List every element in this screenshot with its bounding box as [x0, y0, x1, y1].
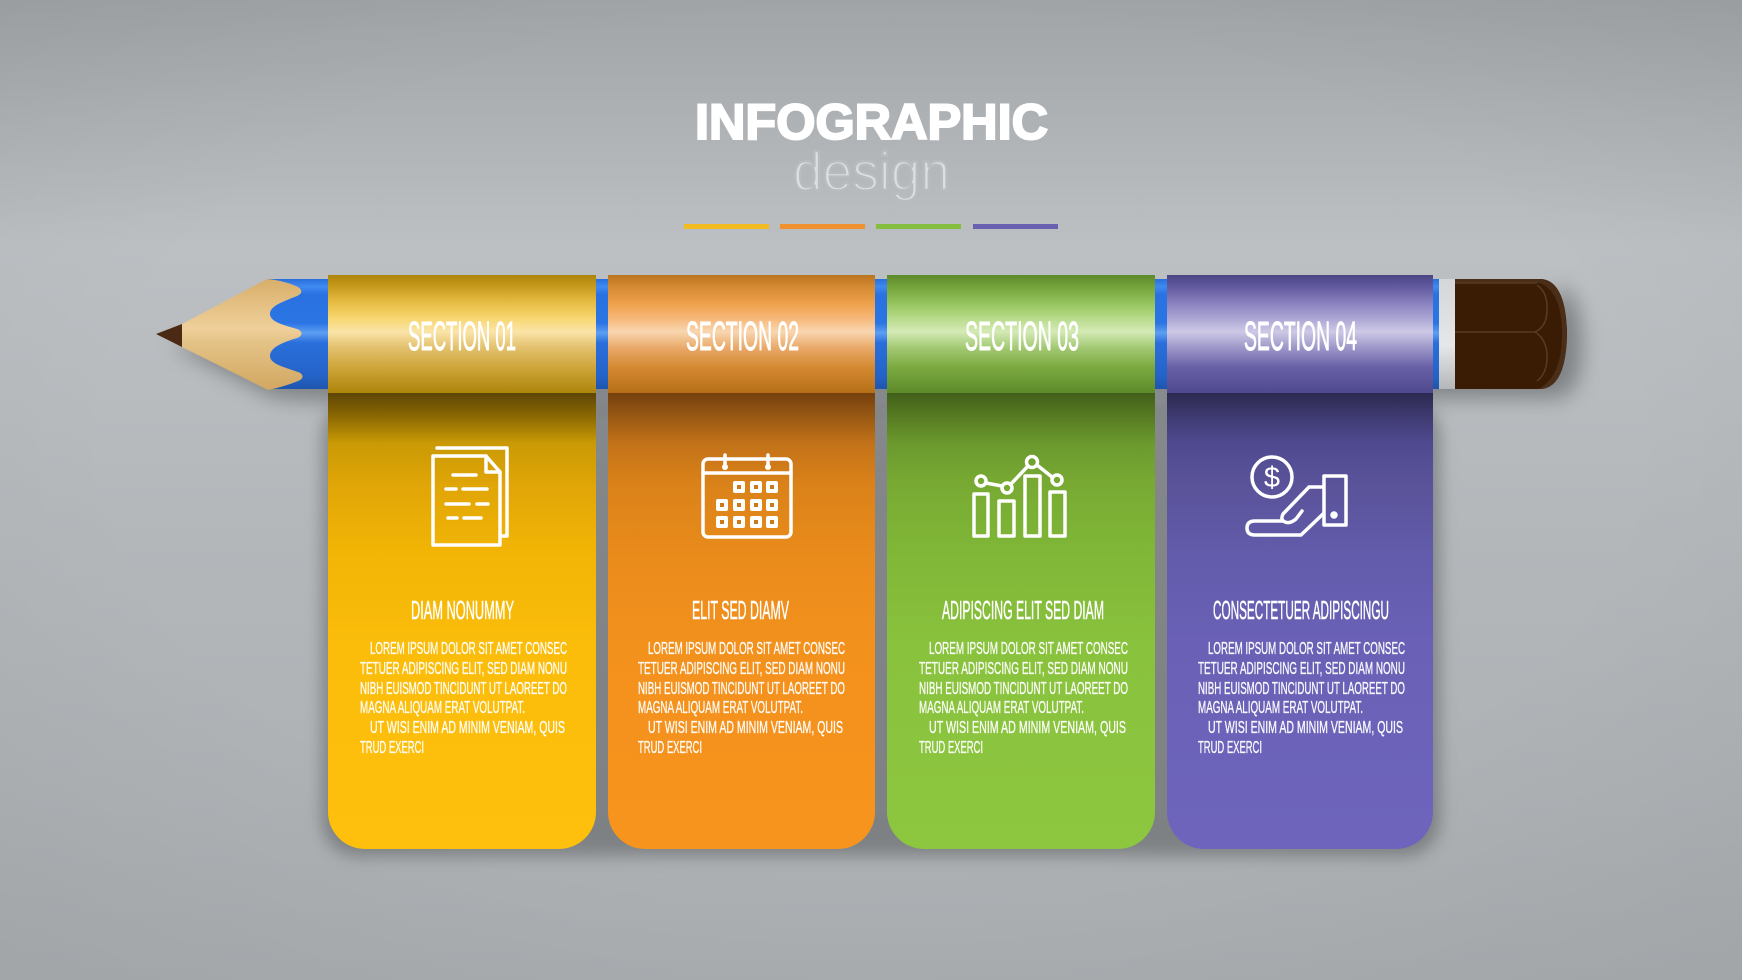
body text: MAGNA ALIQUAM ERAT VOLUTPAT. [360, 697, 525, 717]
body text: NIBH EUISMOD TINCIDUNT UT LAOREET DO [919, 678, 1128, 698]
panel: section 03: ADIPISCING ELIT SED DIAM [942, 595, 1104, 625]
body text: MAGNA ALIQUAM ERAT VOLUTPAT. [638, 697, 803, 717]
pencil lead [156, 324, 182, 347]
body text: LOREM IPSUM DOLOR SIT AMET CONSEC [648, 638, 845, 658]
body text: TETUER ADIPISCING ELIT, SED DIAM NONU [360, 658, 567, 678]
body text: UT WISI ENIM AD MINIM VENIAM, QUIS [929, 717, 1126, 737]
body text: TETUER ADIPISCING ELIT, SED DIAM NONU [638, 658, 845, 678]
icon: hand with coin: $ [1264, 462, 1280, 494]
panel body [1167, 393, 1433, 849]
body text: TRUD EXERCI [919, 737, 983, 757]
colour key bars [684, 224, 1058, 229]
panel: section 01: SECTION 01 [408, 313, 516, 359]
subtitle: design [793, 142, 950, 202]
body text: NIBH EUISMOD TINCIDUNT UT LAOREET DO [360, 678, 567, 698]
body text: NIBH EUISMOD TINCIDUNT UT LAOREET DO [638, 678, 845, 698]
panel body [887, 393, 1155, 849]
body text: UT WISI ENIM AD MINIM VENIAM, QUIS [648, 717, 843, 737]
panel: section 04: CONSECTETUER ADIPISCINGU [1213, 595, 1389, 625]
icon: calendar [703, 455, 791, 537]
pencil ferrule [1439, 279, 1455, 389]
title: INFOGRAPHIC [695, 94, 1048, 150]
band [1167, 275, 1433, 393]
pencil wood tip [182, 279, 302, 390]
body text: TRUD EXERCI [1198, 737, 1262, 757]
panel: section 02: SECTION 02 [686, 313, 799, 359]
pencil [156, 279, 1567, 390]
panel body [608, 393, 875, 849]
icon: document [433, 448, 507, 545]
body text [360, 638, 567, 757]
body text [1198, 638, 1405, 757]
body text: LOREM IPSUM DOLOR SIT AMET CONSEC [370, 638, 567, 658]
panel: section 02: ELIT SED DIAMV [692, 595, 789, 625]
panel: section 04: SECTION 04 [1244, 313, 1357, 359]
body text: MAGNA ALIQUAM ERAT VOLUTPAT. [1198, 697, 1363, 717]
panel: section 02 [608, 275, 875, 849]
body text: LOREM IPSUM DOLOR SIT AMET CONSEC [1208, 638, 1405, 658]
panel: section 01 [328, 275, 596, 849]
body text: TRUD EXERCI [360, 737, 424, 757]
panel: section 04 [1167, 275, 1433, 849]
body text [919, 638, 1128, 757]
shadows [170, 285, 1582, 856]
body text: MAGNA ALIQUAM ERAT VOLUTPAT. [919, 697, 1084, 717]
body text: LOREM IPSUM DOLOR SIT AMET CONSEC [929, 638, 1128, 658]
body text [638, 638, 845, 757]
icon: hand with coin [1247, 457, 1346, 535]
icon: bar chart [974, 456, 1065, 536]
pencil eraser [1455, 279, 1567, 389]
band [887, 275, 1155, 393]
band [608, 275, 875, 393]
panel: section 03 [887, 275, 1155, 849]
body text: UT WISI ENIM AD MINIM VENIAM, QUIS [1208, 717, 1403, 737]
band [328, 275, 596, 393]
panel: section 01: DIAM NONUMMY [411, 595, 514, 625]
body text: UT WISI ENIM AD MINIM VENIAM, QUIS [370, 717, 565, 737]
panel: section 03: SECTION 03 [965, 313, 1079, 359]
body text: TRUD EXERCI [638, 737, 702, 757]
body text: NIBH EUISMOD TINCIDUNT UT LAOREET DO [1198, 678, 1405, 698]
pencil blue body [268, 279, 1439, 389]
panel body [328, 393, 596, 849]
body text: TETUER ADIPISCING ELIT, SED DIAM NONU [1198, 658, 1405, 678]
body text: TETUER ADIPISCING ELIT, SED DIAM NONU [919, 658, 1128, 678]
